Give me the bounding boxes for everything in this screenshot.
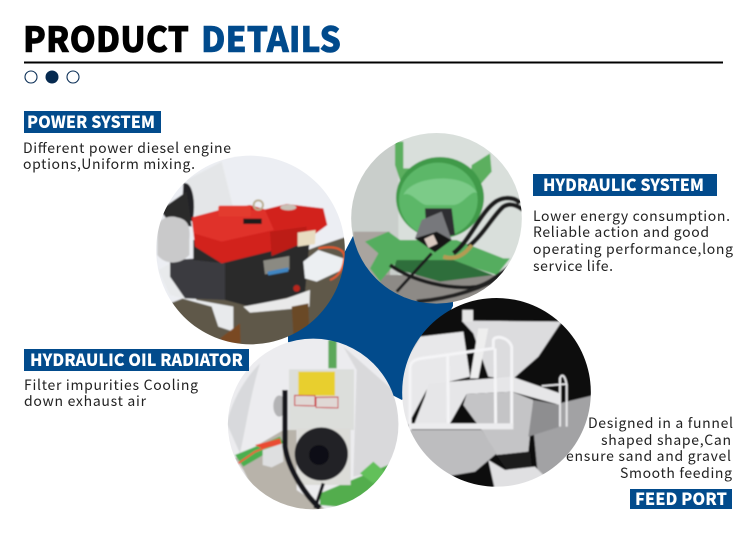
text: feed port description (566, 413, 733, 483)
label: power system: POWER SYSTEM (27, 108, 155, 133)
text: hydraulic system description: service life. (533, 256, 613, 276)
text: hydraulic system description: Reliable action and good (533, 222, 709, 242)
title: PRODUCT (23, 12, 189, 63)
pagination dots (25, 70, 79, 84)
text: power system description (23, 138, 231, 174)
text: hydraulic system description (533, 206, 733, 276)
text: radiator description: down exhaust air (24, 391, 147, 411)
label: hydraulic oil radiator: HYDRAULIC OIL RADIATOR (30, 346, 243, 371)
text: feed port description: Designed in a funnel (588, 413, 733, 433)
title (23, 12, 341, 63)
text: power system description: Different power diesel engine (23, 138, 231, 158)
photo: feed port hopper (402, 298, 591, 487)
text: power system description: options,Uniform mixing. (23, 154, 195, 174)
photo: hydraulic motor (351, 133, 522, 304)
text: hydraulic system description: operating performance,long (533, 239, 733, 259)
text: radiator description (24, 375, 198, 411)
label: hydraulic system: HYDRAULIC SYSTEM (543, 171, 704, 196)
text: feed port description: Smooth feeding (620, 463, 732, 483)
central blue shape (288, 236, 453, 400)
text: hydraulic system description: Lower energy consumption. (533, 206, 730, 226)
text: radiator description: Filter impurities Cooling (24, 375, 198, 395)
label: feed port: FEED PORT (635, 485, 727, 510)
photo: diesel engine (156, 156, 345, 344)
title: DETAILS (201, 12, 341, 63)
text: feed port description: shaped shape,Can (601, 430, 731, 450)
text: feed port description: ensure sand and gravel (566, 446, 731, 466)
photo: oil radiator (228, 338, 398, 510)
